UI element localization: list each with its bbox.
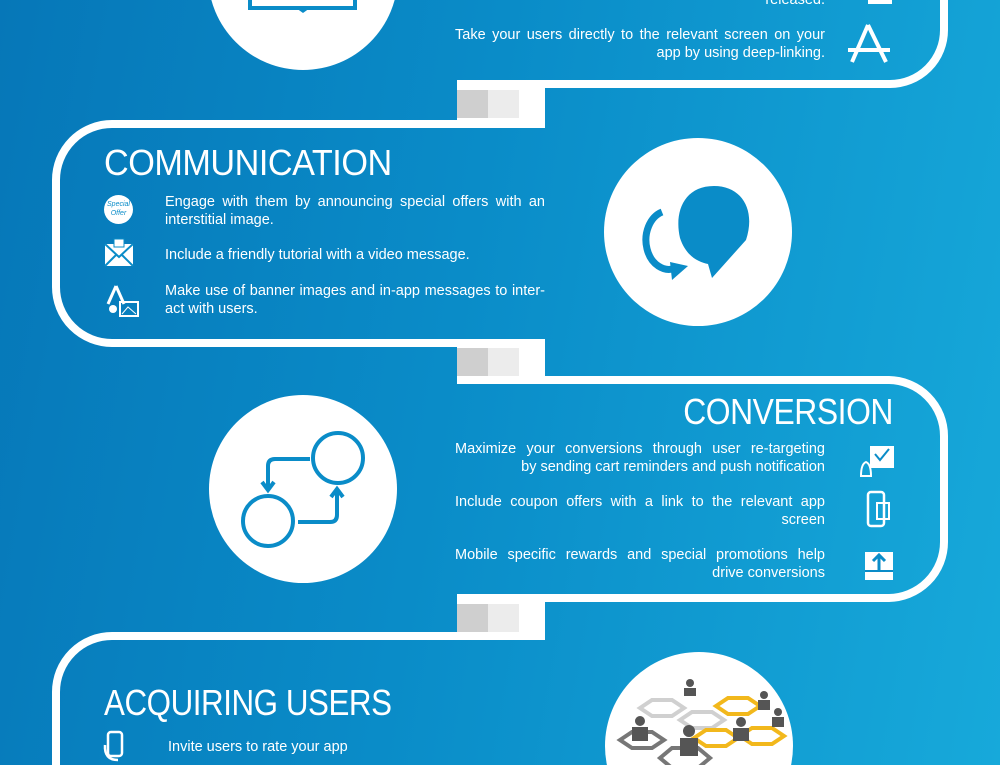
text: communication items bbox=[104, 194, 545, 317]
text: conversion items: Mobile specific rewards and special promotions help bbox=[455, 547, 825, 563]
heading: communication: COMMUNICATION bbox=[104, 142, 392, 183]
text: app by using deep-linking. bbox=[657, 45, 825, 61]
icon: video mail bbox=[104, 238, 134, 266]
text: conversion items: screen bbox=[781, 512, 825, 528]
icon: banner bbox=[106, 285, 139, 317]
text: conversion items: Maximize your conversions through user re-targeting bbox=[455, 441, 825, 457]
text: acquiring item: Invite users to rate your app bbox=[168, 739, 348, 755]
icon: special offer bbox=[104, 195, 133, 224]
text: communication items: Engage with them by announcing special offers with an interstitial image. bbox=[165, 194, 545, 228]
icons: conversion bbox=[860, 446, 894, 580]
text: conversion items: by sending cart reminders and push notification bbox=[521, 459, 825, 475]
text: conversion items bbox=[455, 441, 894, 581]
text: communication items: Make use of banner images and in-app messages to inter-act with users. bbox=[165, 283, 545, 317]
icon: special offer: Special bbox=[107, 201, 130, 208]
text: Take your users directly to the relevant screen on your bbox=[455, 27, 825, 43]
text: conversion items: drive conversions bbox=[712, 565, 825, 581]
icon: special offer: Offer bbox=[111, 210, 126, 217]
text: conversion items: Include coupon offers with a link to the relevant app bbox=[455, 494, 825, 510]
heading: acquiring users: ACQUIRING USERS bbox=[104, 682, 392, 723]
text: communication items: Include a friendly tutorial with a video message. bbox=[165, 247, 470, 263]
heading: conversion: CONVERSION bbox=[683, 391, 893, 432]
